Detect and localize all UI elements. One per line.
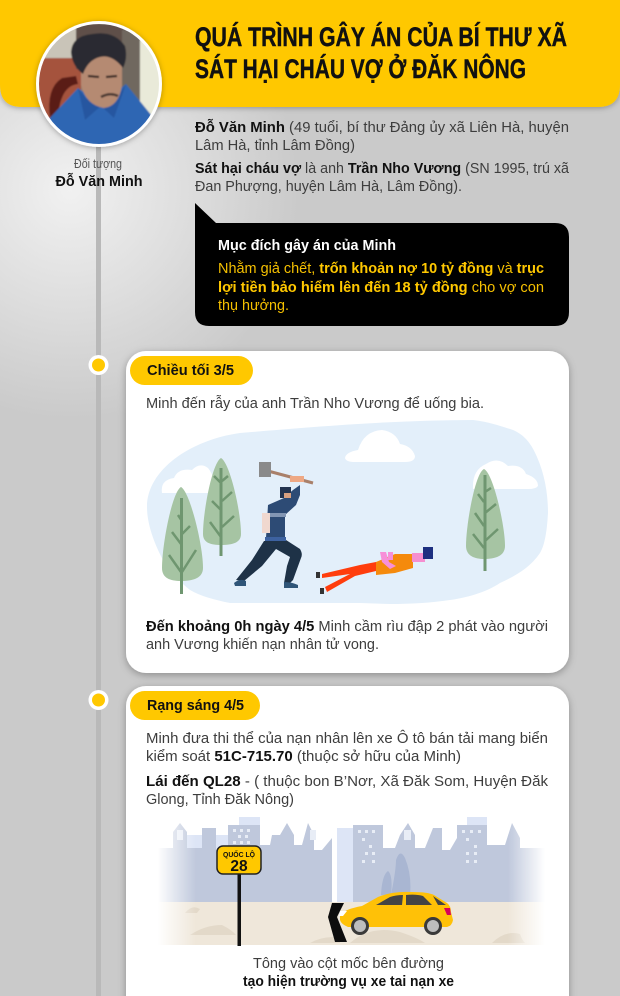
tree 2 (203, 458, 241, 556)
portrait photo (36, 20, 165, 150)
subject caption: Đỗ Văn Minh (56, 173, 142, 190)
icon: milestone (328, 903, 347, 942)
subject caption: Đối tượng (74, 157, 122, 171)
text: transport and route: Minh đưa thi thể của nạn nhân lên xe Ô tô bán tải mang biển (146, 730, 548, 747)
intro text: Lâm Hà, tỉnh Lâm Đồng) (195, 137, 355, 154)
time pill: Rạng sáng 4/5 (147, 698, 244, 714)
text: transport and route: kiểm soát 51C-715.70 (thuộc sở hữu của Minh) (146, 748, 461, 765)
timeline dot 1 (88, 355, 108, 375)
title (195, 20, 567, 84)
title: SÁT HẠI CHÁU VỢ Ở ĐĂK NÔNG (195, 52, 526, 84)
text: attack: anh Vương khiến nạn nhân tử vong. (146, 636, 379, 653)
caption: staged accident: tạo hiện trường vụ xe tai nạn xe (243, 973, 454, 990)
timeline dot 2 (88, 690, 108, 710)
callout: motive: thụ hưởng. (218, 297, 289, 314)
text: transport and route (146, 730, 548, 808)
text: arrival: Minh đến rẫy của anh Trần Nho Vương để uống bia. (146, 395, 484, 412)
callout: motive (195, 203, 569, 326)
illustration: attack scene (147, 420, 548, 604)
time pill (130, 691, 260, 720)
caption: staged accident: Tông vào cột mốc bên đường (253, 955, 444, 972)
icon: road sign QL28: 28 (230, 858, 248, 875)
text: attack: Đến khoảng 0h ngày 4/5 Minh cầm rìu đập 2 phát vào người (146, 618, 548, 635)
intro text: Sát hại cháu vợ là anh Trần Nho Vương (SN 1995, trú xã (195, 160, 570, 177)
illustration: staged crash scene (148, 815, 554, 947)
callout: motive: lợi tiền bảo hiểm lên đến 18 tỷ đồng cho vợ con (218, 279, 544, 296)
tree 3 (466, 469, 505, 571)
header band (0, 0, 620, 107)
panel: dawn 4/5 (126, 686, 569, 996)
text: attack (146, 618, 548, 653)
text: transport and route: Glong, Tỉnh Đăk Nông) (146, 791, 294, 808)
icon: road sign QL28 (217, 846, 261, 946)
icon: yellow car (339, 892, 453, 935)
intro text: Đan Phượng, huyện Lâm Hà, Lâm Đồng). (195, 178, 462, 195)
timeline line (96, 100, 101, 996)
callout: motive: Mục đích gây án của Minh (218, 238, 396, 254)
figure: victim lying on ground (316, 547, 433, 594)
figure: attacker with axe (234, 462, 313, 588)
callout: motive: Nhằm giả chết, trốn khoản nợ 10 tỷ đồng và trục (218, 260, 544, 277)
text: transport and route: Lái đến QL28 - ( thuộc bon B’Nơr, Xã Đăk Som, Huyện Đăk (146, 773, 548, 790)
panel: evening 3/5 (126, 351, 569, 673)
intro text: Đỗ Văn Minh (49 tuổi, bí thư Đảng ủy xã Liên Hà, huyện (195, 119, 569, 136)
subject caption (56, 157, 142, 190)
icon: road sign QL28: QUỐC LỘ (223, 849, 255, 859)
time pill: Chiều tối 3/5 (147, 363, 234, 379)
intro text (195, 119, 570, 195)
time pill (130, 356, 253, 385)
tree 1 (162, 487, 203, 594)
caption: staged accident (243, 955, 454, 990)
